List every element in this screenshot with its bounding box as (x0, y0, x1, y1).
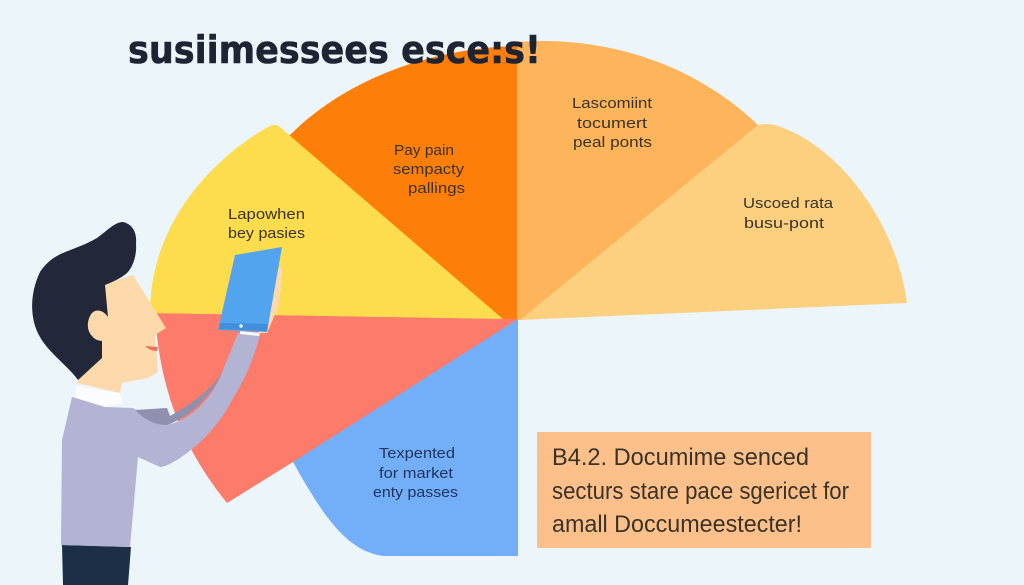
collar (75, 386, 123, 407)
mouth (145, 346, 158, 351)
tablet button (239, 324, 243, 328)
hair (32, 222, 136, 380)
callout: amall Doccumeestecter! (552, 511, 802, 538)
tablet base (219, 323, 268, 331)
callout: secturs stare pace sgericet for (552, 478, 849, 505)
ear (88, 310, 108, 341)
label: deep orange segment: sempacty (393, 161, 465, 178)
neck and face (77, 275, 166, 393)
pants (62, 545, 131, 585)
label: light orange segment (572, 95, 653, 151)
label: yellow segment: Lapowhen (228, 206, 305, 223)
label: pale orange segment (743, 195, 834, 232)
label: blue segment (373, 445, 458, 501)
label: blue segment: Texpented (379, 445, 455, 462)
label: deep orange segment: pallings (408, 180, 465, 197)
label: light orange segment: Lascomiint (572, 95, 653, 112)
label: deep orange segment: Pay pain (394, 142, 454, 159)
sleeve shadow (135, 370, 223, 425)
label: yellow segment (228, 206, 305, 242)
segment: pale orange (520, 124, 907, 320)
segment: deep orange (285, 46, 518, 325)
cuff (240, 331, 260, 336)
segment: blue (293, 319, 518, 556)
label: yellow segment: bey pasies (228, 225, 305, 242)
label: blue segment: enty passes (373, 484, 458, 501)
hand (258, 268, 283, 333)
segment: light orange (517, 41, 762, 320)
label: light orange segment: peal ponts (573, 134, 652, 151)
label: deep orange segment (393, 142, 465, 197)
title: susiimessees esce:s! (128, 28, 541, 72)
sweater (61, 333, 260, 547)
segment: red (155, 313, 518, 503)
label: light orange segment: tocumert (577, 115, 648, 132)
label: pale orange segment: busu-pont (744, 215, 825, 232)
label: blue segment: for market (379, 465, 454, 482)
figure: person holding tablet (32, 222, 283, 585)
tablet (218, 247, 282, 332)
callout (537, 432, 871, 548)
segment: yellow (150, 125, 503, 319)
label: pale orange segment: Uscoed rata (743, 195, 834, 212)
callout: B4.2. Documime senced (552, 444, 809, 471)
